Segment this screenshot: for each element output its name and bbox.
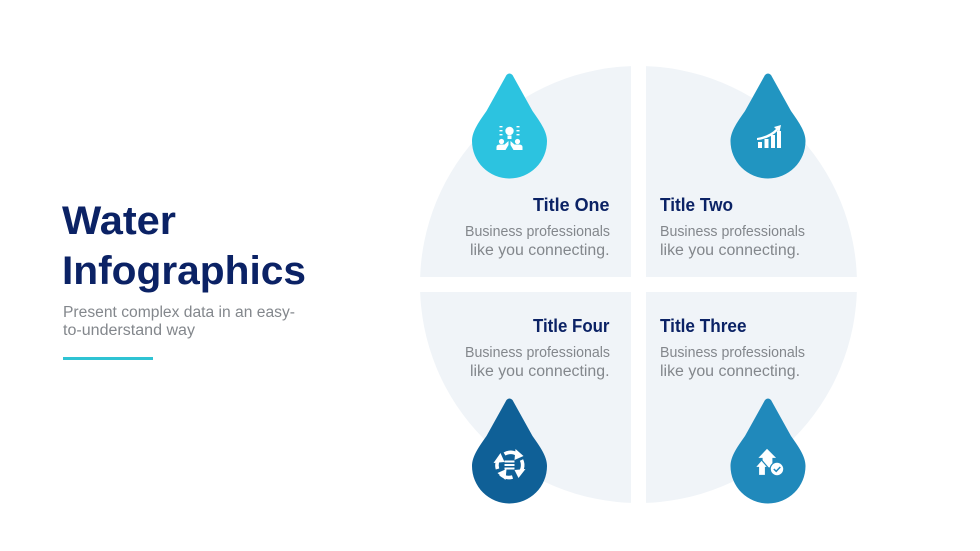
panel: title two: Business professionals (660, 224, 805, 240)
title: Infographics (62, 249, 306, 293)
panel: title three (660, 316, 805, 380)
icon: drop one with lightbulb and people (472, 74, 547, 178)
icon: drop four with cycle arrows (472, 398, 547, 504)
icon: drop two with growth chart (730, 74, 806, 178)
panel: title one: Title One (533, 195, 610, 215)
panel: title one: Business professionals (465, 224, 610, 240)
panel: title one (465, 195, 610, 259)
panel: title four: Business professionals (465, 345, 610, 361)
panel: title three: like you connecting. (660, 363, 800, 380)
accent line (63, 357, 153, 360)
panel: title one: like you connecting. (470, 242, 610, 259)
panel: title two: Title Two (660, 195, 733, 215)
quadrant circle (420, 66, 857, 503)
panel: title two (660, 195, 805, 259)
panel: title two: like you connecting. (660, 242, 800, 259)
panel: title three: Title Three (660, 316, 746, 336)
panel: title four: Title Four (533, 316, 610, 336)
subtitle (63, 304, 295, 339)
icon: drop three with arrows and check badge (730, 398, 806, 504)
panel: title three: Business professionals (660, 345, 805, 361)
title (62, 199, 306, 293)
title: Water (62, 199, 176, 243)
panel: title four: like you connecting. (470, 363, 610, 380)
panel: title four (465, 316, 610, 380)
subtitle: to-understand way (63, 322, 195, 339)
subtitle: Present complex data in an easy- (63, 304, 295, 321)
